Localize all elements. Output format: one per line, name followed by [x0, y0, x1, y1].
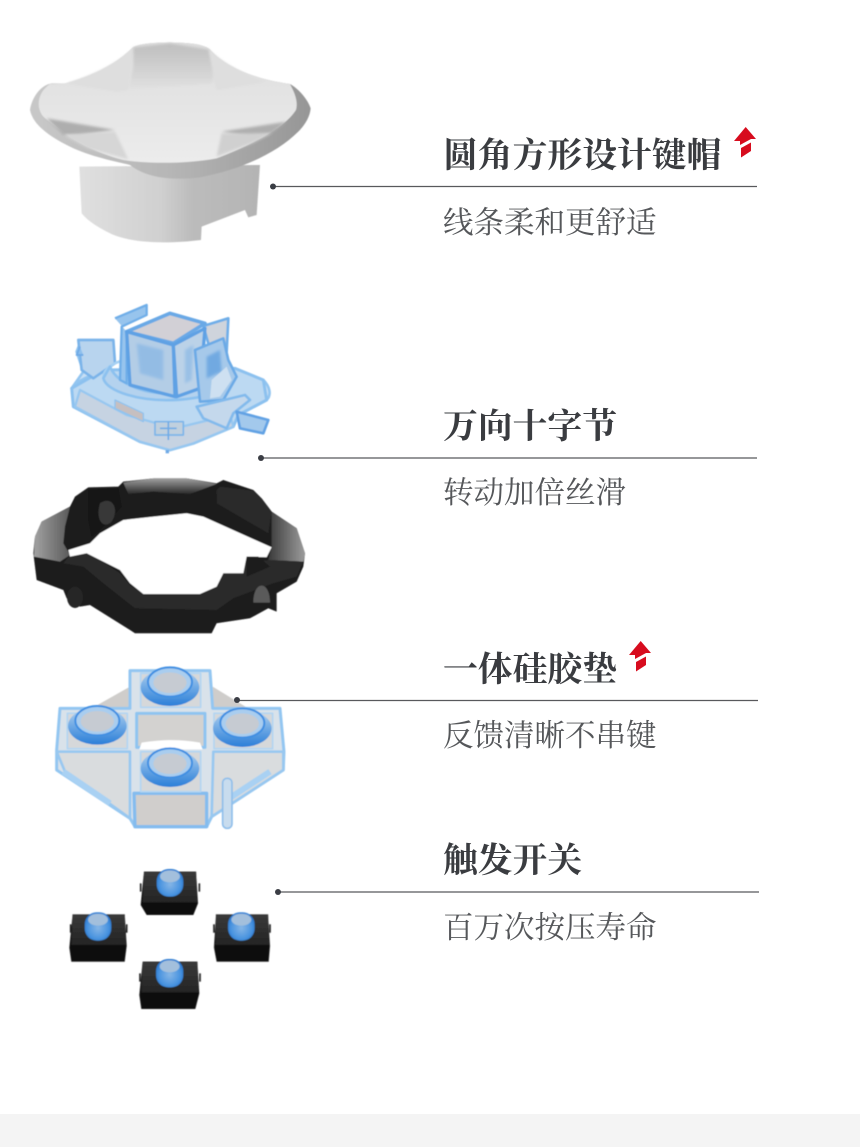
- description: cross axle: 转动加倍丝滑: [443, 476, 626, 510]
- switch: right: [214, 912, 270, 962]
- leader dot: cross axle: [258, 455, 264, 461]
- icon: red upgrade arrow: [734, 127, 756, 158]
- icon: red upgrade arrow: [629, 641, 651, 672]
- description: keycap: 线条柔和更舒适: [443, 206, 656, 240]
- icon: blue silicone pad: [57, 667, 284, 828]
- leader line: keycap: [272, 186, 757, 188]
- switch: left: [69, 912, 127, 962]
- leader line: silicone pad: [236, 700, 758, 702]
- button: top: [141, 667, 199, 706]
- callout: keycap: [270, 127, 757, 240]
- heading: switches: 触发开关: [443, 841, 582, 880]
- callout: silicone pad: [234, 641, 758, 753]
- leader line: cross axle: [261, 457, 757, 459]
- switch: bottom: [139, 959, 200, 1009]
- button: left: [68, 706, 127, 745]
- leader dot: keycap: [270, 184, 276, 190]
- icon: silver keycap: [30, 42, 311, 242]
- bottom band: [0, 1114, 860, 1147]
- button: bottom: [141, 748, 199, 787]
- icon: four tactile switches: [69, 869, 270, 1009]
- heading: cross axle: 万向十字节: [443, 407, 617, 446]
- callout: cross axle: [258, 407, 757, 510]
- icon: black ring frame: [33, 478, 305, 633]
- leader line: switches: [278, 891, 759, 893]
- leader dot: switches: [275, 889, 281, 895]
- icon: blue translucent cross axle: [72, 305, 270, 453]
- heading: silicone pad: 一体硅胶垫: [443, 650, 617, 689]
- switch: top: [141, 869, 199, 915]
- leader dot: silicone pad: [234, 697, 240, 703]
- description: switches: 百万次按压寿命: [443, 911, 656, 945]
- description: silicone pad: 反馈清晰不串键: [443, 719, 656, 753]
- callout: switches: [275, 841, 759, 945]
- heading: keycap: 圆角方形设计键帽: [443, 136, 721, 175]
- button: right: [213, 708, 272, 747]
